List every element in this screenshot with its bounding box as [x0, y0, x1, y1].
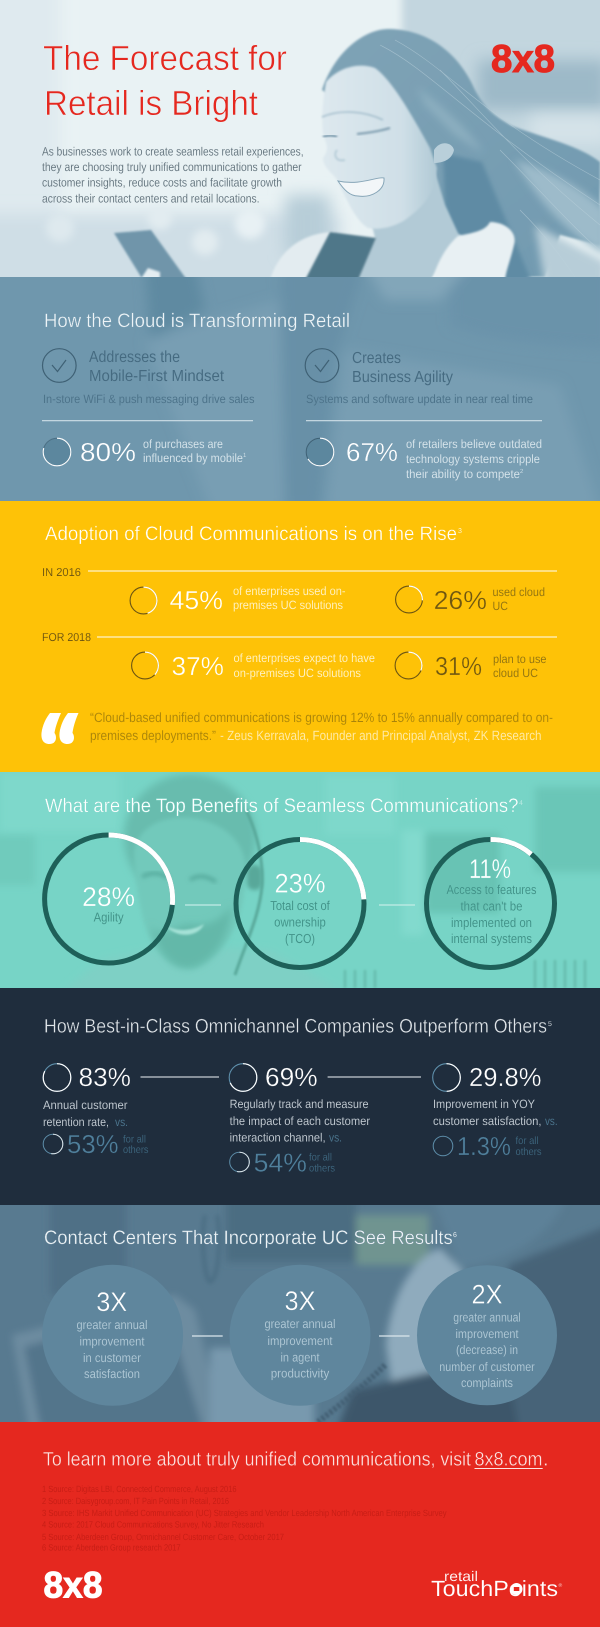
heading: How the Cloud is Transforming Retail [44, 310, 350, 332]
benefit: mobile-first mindset [42, 349, 254, 406]
panel: top benefits of seamless communications [0, 772, 600, 988]
stat: 80%: 1 [243, 452, 247, 459]
column: 83% retention: Annual customer [43, 1098, 128, 1112]
heading: What are the Top Benefits of Seamless Communications? [45, 795, 519, 817]
row: for 2018 [42, 632, 557, 681]
benefit: business agility: Creates [352, 350, 401, 367]
stat: 31% [395, 651, 547, 681]
logo: Retail TouchPoints [431, 1568, 562, 1601]
benefit: mobile-first mindset: Mobile-First Mindset [89, 368, 225, 385]
icon: check circle [305, 349, 339, 382]
column: 29.8% satisfaction: others [516, 1146, 542, 1158]
result circle: customer satisfaction: greater annual [76, 1318, 148, 1332]
result circle: customer satisfaction: improvement [80, 1335, 145, 1349]
stat: 80%: influenced by mobile [143, 451, 243, 465]
stat: 37%: of enterprises expect to have [234, 651, 375, 665]
stat: 67%: 2 [520, 468, 524, 475]
benefit ring: 11% access to features: Access to features [446, 882, 537, 897]
ring [306, 438, 334, 466]
logo: Retail TouchPoints: ® [558, 1583, 562, 1589]
stat: 67%: 67% [346, 437, 398, 467]
logo: 8x8: 8x8 [491, 38, 555, 81]
column: 69% tracking: interaction channel, [230, 1131, 326, 1145]
sources: 5 Source: Aberdeen Group, Omnichannel Customer Care, October 2017 [42, 1532, 284, 1542]
stat: 26%: used cloud [492, 585, 545, 599]
row: for 2018: FOR 2018 [42, 632, 91, 644]
sources: 3 Source: IHS Markit Unified Communication (UC) Strategies and Vendor Leadership North American Enterprise Survey [42, 1508, 447, 1518]
result circle: customer complaints: (decrease) in [456, 1343, 518, 1357]
column: 69% tracking: others [309, 1163, 335, 1175]
column: 29.8% satisfaction: for all [516, 1135, 538, 1147]
stat: 37%: 37% [172, 651, 224, 681]
heading: Adoption of Cloud Communications is on the Rise [45, 523, 457, 545]
benefit ring: 23% total cost of ownership: (TCO) [285, 931, 315, 946]
result circle: customer complaints: 2X [472, 1280, 502, 1310]
column: 69% tracking: Regularly track and measure [230, 1097, 369, 1111]
stat: 45%: premises UC solutions [233, 598, 343, 612]
call to action: To learn more about truly unified communications, visit [43, 1449, 472, 1471]
benefit: business agility [305, 349, 533, 406]
benefit ring: 28% agility: Agility [94, 910, 124, 925]
call to action: . [543, 1449, 548, 1471]
intro text: they are choosing truly unified communications to gather [42, 160, 302, 174]
panel: contact centers results [0, 1205, 600, 1422]
column: 29.8% satisfaction: Improvement in YOY [433, 1097, 535, 1111]
benefit ring: 23% total cost of ownership [236, 840, 364, 968]
intro text: customer insights, reduce costs and facilitate growth [42, 176, 282, 190]
benefit ring: 28% agility: 28% [82, 882, 135, 912]
stat: 67% [306, 437, 542, 481]
column: 83% retention: vs. [115, 1115, 128, 1129]
benefit ring: 11% access to features [426, 840, 554, 968]
benefit: business agility: Business Agility [352, 369, 453, 386]
result circle: customer satisfaction: satisfaction [84, 1367, 140, 1381]
column: 83% retention [43, 1062, 148, 1159]
sources: 6 Source: Aberdeen Group research 2017 [42, 1543, 181, 1553]
intro text: across their contact centers and retail locations. [42, 191, 260, 205]
stat: 80%: 80% [80, 437, 136, 467]
stat: 31%: plan to use [493, 652, 547, 666]
result circle: customer satisfaction: in customer [83, 1351, 141, 1365]
quote text: premises deployments.” [90, 728, 216, 743]
stat: 67%: their ability to compete [406, 467, 520, 481]
column: 69% tracking: for all [309, 1152, 332, 1164]
stat: 67%: technology systems cripple [406, 452, 540, 466]
title [43, 39, 287, 123]
column: 29.8% satisfaction: 29.8% [469, 1062, 542, 1092]
column: 29.8% satisfaction: 1.3% [457, 1131, 511, 1161]
row: in 2016: IN 2016 [42, 567, 81, 579]
benefit ring: 11% access to features: internal systems [451, 931, 532, 946]
stat: 31%: 31% [435, 651, 482, 681]
stat: 37% [132, 651, 375, 681]
intro text: As businesses work to create seamless retail experiences, [42, 145, 304, 159]
panel: adoption of cloud communications [0, 501, 600, 772]
stat: 37%: on-premises UC solutions [234, 666, 361, 680]
sources [42, 1484, 447, 1553]
logo: 8x8 white: 8x8 [44, 1564, 102, 1606]
heading: 4 [519, 800, 523, 807]
panel: how the cloud is transforming retail [0, 277, 600, 501]
photo background [0, 0, 600, 304]
stat: 31%: cloud UC [493, 666, 538, 680]
heading: Contact Centers That Incorporate UC See Results [44, 1227, 453, 1249]
heading: 6 [453, 1232, 457, 1239]
result circle: agent productivity: 3X [284, 1286, 316, 1316]
column: 83% retention: others [123, 1144, 148, 1156]
panel: hero with photo [0, 0, 600, 277]
heading: How Best-in-Class Omnichannel Companies Outperform Others [44, 1016, 547, 1038]
result circle: customer satisfaction [42, 1265, 183, 1406]
heading: 3 [458, 528, 462, 535]
column: 69% tracking: 54% [254, 1148, 307, 1178]
sources: 1 Source: Digitas LBI, Connected Commerce, August 2016 [42, 1484, 236, 1494]
column: 29.8% satisfaction: customer satisfaction, [433, 1114, 542, 1128]
sources: 2 Source: Daisygroup.com, IT Pain Points in Retail, 2016 [42, 1496, 229, 1506]
sources: 4 Source: 2017 Cloud Communications Survey, No Jitter Research [42, 1520, 264, 1530]
result circle: customer complaints: greater annual [453, 1311, 521, 1325]
benefit ring: 11% access to features: implemented on [451, 915, 532, 930]
icon: quotation mark [41, 713, 78, 744]
result circle: customer complaints: number of customer [439, 1360, 535, 1374]
stat: 26%: 26% [434, 585, 487, 615]
benefit ring: 28% agility [45, 835, 173, 963]
column: 29.8% satisfaction [433, 1062, 558, 1161]
column: 83% retention: retention rate, [43, 1115, 109, 1129]
column: 83% retention: 53% [67, 1129, 119, 1159]
result circle: agent productivity: greater annual [264, 1317, 336, 1331]
title: The Forecast for [43, 39, 287, 78]
stat: 80% [43, 437, 247, 467]
result circle: agent productivity [230, 1265, 370, 1406]
woman photo illustration [114, 29, 600, 285]
column: 69% tracking: vs. [329, 1131, 342, 1145]
call to action: 8x8.com [474, 1449, 542, 1471]
result circle: customer complaints: improvement [456, 1327, 519, 1341]
logo: Retail TouchPoints: retail [444, 1568, 478, 1584]
result circle: customer complaints [417, 1265, 557, 1405]
result circle: customer satisfaction: 3X [96, 1287, 127, 1317]
row: in 2016 [42, 567, 557, 615]
logo: Retail TouchPoints: TouchPoints [431, 1576, 558, 1601]
stat: 26%: UC [492, 599, 508, 613]
benefit ring: 23% total cost of ownership: Total cost of [270, 898, 330, 913]
panel: best-in-class omnichannel companies [0, 988, 600, 1205]
benefit: mobile-first mindset: Addresses the [89, 349, 180, 366]
heading: 5 [548, 1021, 552, 1028]
intro text [42, 145, 304, 205]
benefit ring: 11% access to features: that can't be [460, 899, 522, 914]
stat: 26% [396, 585, 545, 615]
benefit ring: 23% total cost of ownership: ownership [274, 915, 326, 930]
ring [43, 438, 71, 466]
benefit: business agility: Systems and software update in near real time [306, 392, 533, 406]
man photo illustration [0, 772, 600, 995]
benefit: mobile-first mindset: In-store WiFi & push messaging drive sales [43, 392, 254, 406]
quote text: - Zeus Kerravala, Founder and Principal Analyst, ZK Research [220, 728, 542, 743]
phone call photo illustration [12, 1195, 600, 1435]
benefit ring: 11% access to features: 11% [469, 854, 511, 884]
icon: check circle [42, 349, 76, 382]
column: 83% retention: 83% [78, 1062, 131, 1092]
result circle: customer complaints: complaints [461, 1376, 513, 1390]
benefit ring: 23% total cost of ownership: 23% [274, 869, 326, 899]
column: 69% tracking [229, 1062, 370, 1178]
panel: footer call to action [0, 1422, 600, 1627]
stat: 80%: of purchases are [143, 437, 223, 451]
title: Retail is Bright [44, 84, 258, 123]
stat: 67%: of retailers believe outdated [406, 437, 542, 451]
column: 83% retention: for all [123, 1134, 146, 1146]
result circle: agent productivity: productivity [271, 1367, 330, 1381]
stat: 45%: 45% [170, 585, 223, 615]
result circle: agent productivity: improvement [268, 1334, 333, 1348]
column: 69% tracking: 69% [265, 1062, 318, 1092]
column: 69% tracking: the impact of each customer [230, 1114, 370, 1128]
stat: 45%: of enterprises used on- [233, 584, 346, 598]
quote text [90, 710, 553, 743]
column: 29.8% satisfaction: vs. [545, 1114, 558, 1128]
result circle: agent productivity: in agent [280, 1351, 320, 1365]
stat: 45% [130, 584, 346, 615]
quote text: “Cloud-based unified communications is growing 12% to 15% annually compared to on- [90, 710, 553, 725]
